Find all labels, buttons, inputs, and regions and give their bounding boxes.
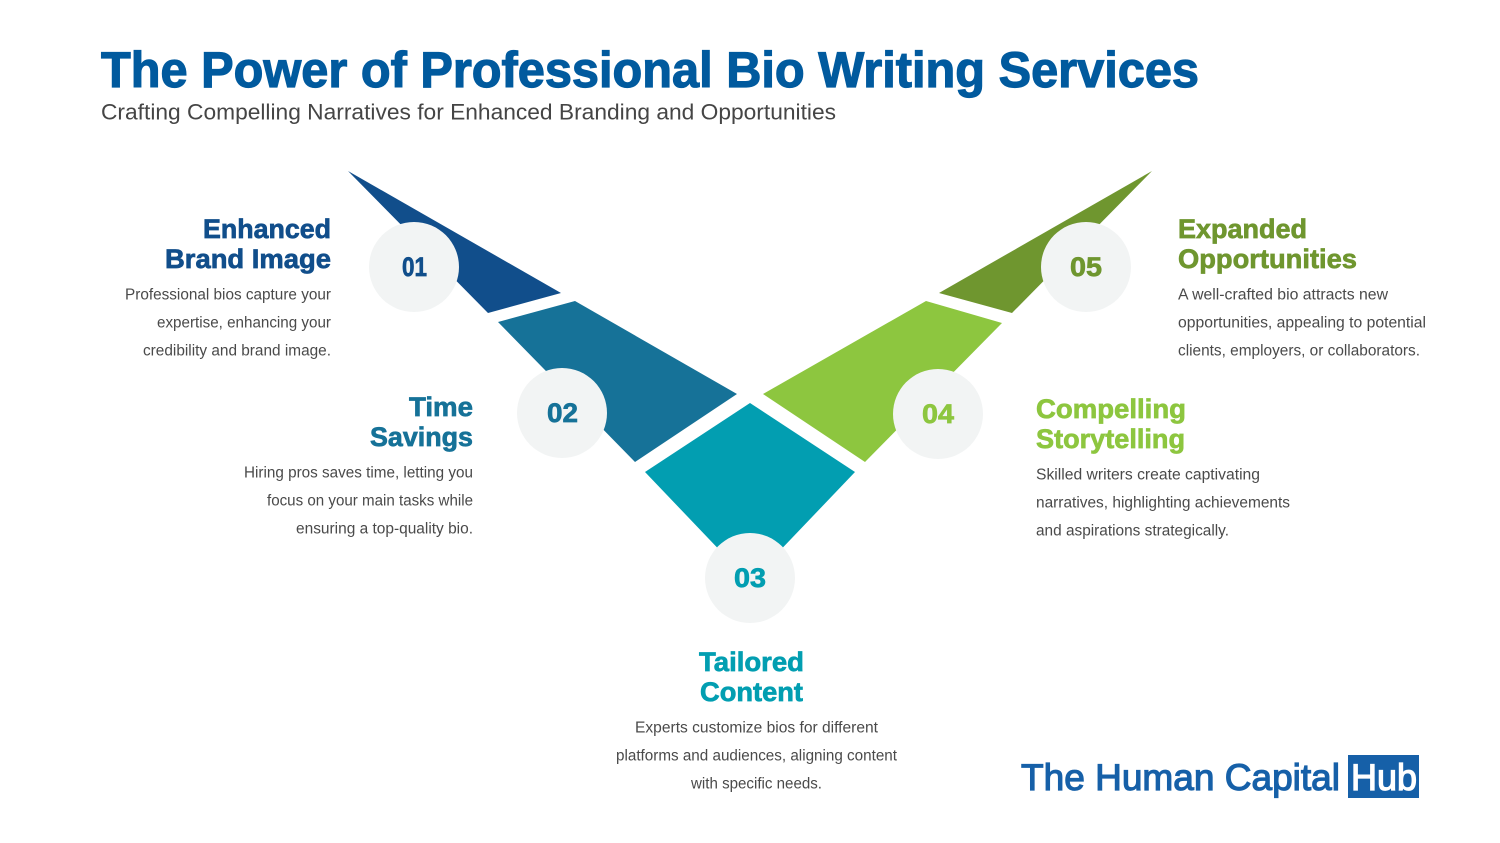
step 02 number badge (517, 368, 607, 458)
body: Time Savings: Hiring pros saves time, letting you (244, 464, 473, 482)
body: Expanded Opportunities (1178, 286, 1426, 360)
body: Enhanced Brand Image: credibility and brand image. (143, 342, 331, 360)
text block: Enhanced Brand Image (125, 214, 331, 360)
logo: The Human Capital Hub: Hub (1351, 757, 1417, 798)
text block: Compelling Storytelling (1036, 394, 1290, 540)
heading: Expanded Opportunities (1178, 214, 1357, 274)
heading: Enhanced Brand Image: Enhanced (203, 214, 331, 244)
heading: Time Savings: Savings (370, 422, 473, 452)
chevron segment 05 (939, 171, 1152, 313)
chevron segment 04 (763, 301, 1002, 462)
chevron segment 02 (498, 301, 737, 462)
heading: Time Savings: Time (409, 392, 473, 422)
body: Time Savings: focus on your main tasks while (267, 492, 473, 510)
body: Expanded Opportunities: A well-crafted bio attracts new (1178, 286, 1389, 304)
body: Tailored Content: platforms and audiences, aligning content (616, 748, 898, 764)
heading: Compelling Storytelling: Compelling (1036, 394, 1186, 424)
body: Enhanced Brand Image: expertise, enhancing your (157, 314, 331, 332)
heading: Compelling Storytelling (1036, 394, 1186, 454)
step 03 number badge (705, 533, 795, 623)
step 02 number badge: 02 (547, 398, 578, 428)
step 04 number badge: 04 (922, 399, 954, 429)
step 05 number badge (1041, 222, 1131, 312)
heading: Enhanced Brand Image: Brand Image (165, 244, 331, 274)
text block: Tailored Content (616, 647, 898, 792)
chevron segment 01 (348, 171, 561, 313)
heading: Expanded Opportunities: Opportunities (1178, 244, 1357, 274)
body: Expanded Opportunities: clients, employers, or collaborators. (1178, 342, 1420, 360)
heading: Compelling Storytelling: Storytelling (1036, 424, 1185, 454)
body: Tailored Content: with specific needs. (690, 776, 822, 792)
heading: Time Savings (370, 392, 473, 452)
body: Tailored Content: Experts customize bios for different (635, 720, 879, 736)
step 03 number badge: 03 (734, 563, 766, 593)
body: Compelling Storytelling: and aspirations strategically. (1036, 522, 1229, 540)
heading: Tailored Content (699, 647, 804, 707)
body: Time Savings: ensuring a top-quality bio. (296, 520, 473, 538)
body: Tailored Content (616, 720, 898, 792)
body: Compelling Storytelling (1036, 466, 1290, 540)
subtitle: Crafting Compelling Narratives for Enhanced Branding and Opportunities (101, 100, 836, 124)
step 01 number badge (369, 222, 459, 312)
body: Enhanced Brand Image: Professional bios capture your (125, 286, 331, 304)
step 04 number badge (893, 369, 983, 459)
step 05 number badge: 05 (1070, 252, 1102, 282)
step 01 number badge: 01 (402, 252, 427, 282)
heading: Tailored Content: Tailored (699, 647, 804, 677)
text block: Expanded Opportunities (1178, 214, 1426, 360)
heading: Tailored Content: Content (700, 677, 803, 707)
body: Compelling Storytelling: Skilled writers create captivating (1036, 466, 1260, 484)
text block: Time Savings (244, 392, 473, 538)
heading: Enhanced Brand Image (165, 214, 331, 274)
body: Expanded Opportunities: opportunities, appealing to potential (1178, 314, 1426, 332)
body: Time Savings (244, 464, 473, 538)
body: Enhanced Brand Image (125, 286, 331, 360)
logo: The Human Capital Hub: The Human Capital (1021, 757, 1340, 798)
chevron segment 03 (645, 403, 855, 582)
title: The Power of Professional Bio Writing Services (101, 42, 1199, 98)
body: Compelling Storytelling: narratives, highlighting achievements (1036, 494, 1290, 512)
heading: Expanded Opportunities: Expanded (1178, 214, 1307, 244)
